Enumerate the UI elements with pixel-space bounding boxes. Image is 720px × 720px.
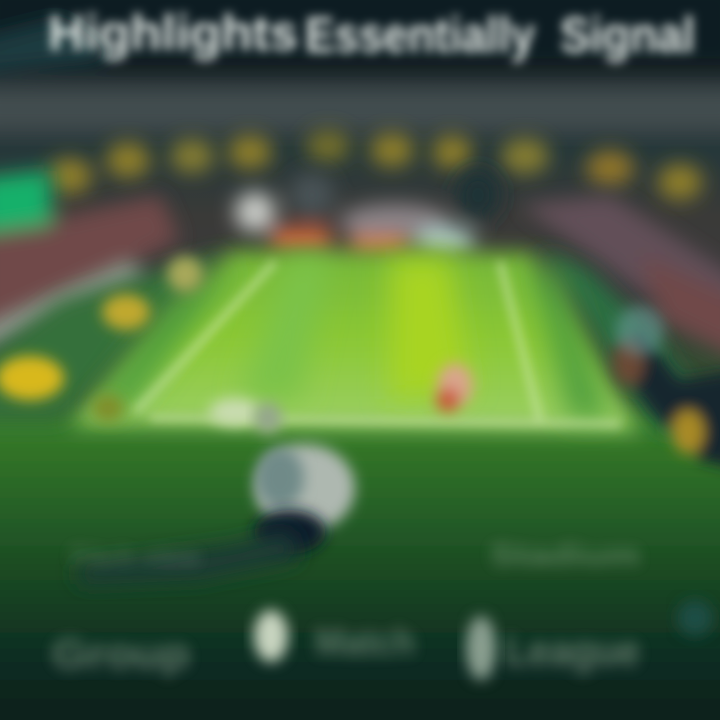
side grass flanks xyxy=(0,250,230,420)
yellow fans at left xyxy=(0,256,203,422)
players on pitch xyxy=(209,363,473,426)
caption labels xyxy=(52,539,640,677)
football pitch xyxy=(70,250,640,432)
icon: bottom centre xyxy=(254,610,288,662)
right caption: Stadium xyxy=(490,539,640,572)
bottom right stat: League xyxy=(505,627,640,674)
left caption: Pitch view xyxy=(70,541,201,571)
title xyxy=(48,5,695,63)
ball shadow xyxy=(75,530,300,585)
stands: crowd row of yellow lights xyxy=(48,130,702,200)
title: Highlights xyxy=(48,5,298,61)
pitch lines xyxy=(135,262,620,424)
foreground grass xyxy=(0,412,720,720)
stands: upper band xyxy=(0,0,720,128)
right foreground figure xyxy=(610,306,720,470)
title: Essentially xyxy=(305,7,535,63)
title: Signal xyxy=(560,7,695,63)
stands: centre end with banners xyxy=(235,169,500,258)
foreground football xyxy=(75,402,355,585)
pitch stripes xyxy=(90,258,610,420)
stands: left and right seating xyxy=(0,170,720,360)
bottom centre stat: Match xyxy=(315,622,415,664)
icon: right corner accent xyxy=(677,600,713,636)
icon: bottom right xyxy=(466,616,496,680)
bottom left stat: Group xyxy=(52,630,190,677)
